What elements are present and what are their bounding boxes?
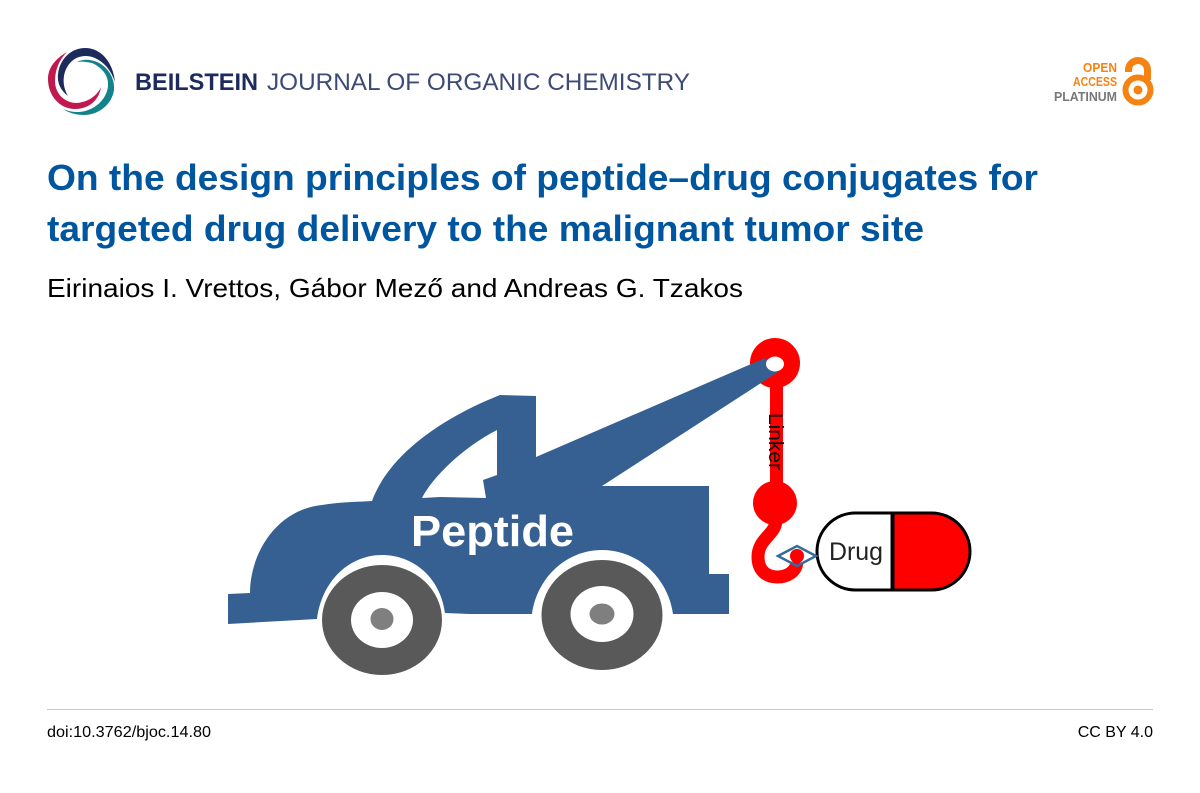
linker ring and chain xyxy=(750,338,800,577)
title xyxy=(47,157,1038,249)
license: CC BY 4.0 xyxy=(1078,724,1153,741)
open access platinum badge: ACCESS xyxy=(1073,75,1117,89)
ring hole xyxy=(766,356,784,372)
drug capsule: Drug xyxy=(829,538,883,566)
peptide truck body xyxy=(228,358,778,624)
open access platinum badge: PLATINUM xyxy=(1054,90,1117,104)
title: targeted drug delivery to the malignant tumor site xyxy=(47,208,924,249)
tow truck illustration xyxy=(228,338,970,675)
rear wheel xyxy=(542,560,662,670)
doi: doi:10.3762/bjoc.14.80 xyxy=(47,724,211,741)
cleavable bond: red dot in blue diamond xyxy=(778,546,816,566)
journal name: JOURNAL OF ORGANIC CHEMISTRY xyxy=(267,69,690,96)
open access platinum badge: OPEN xyxy=(1083,61,1117,75)
footer rule xyxy=(47,709,1153,710)
open access platinum badge xyxy=(1054,60,1150,104)
label: Peptide: Peptide xyxy=(411,507,574,556)
icon: Beilstein swirl logo xyxy=(48,48,115,115)
drug capsule xyxy=(817,513,970,590)
title: On the design principles of peptide–drug conjugates for xyxy=(47,157,1038,198)
label: Linker: Linker xyxy=(764,413,786,470)
authors: Eirinaios I. Vrettos, Gábor Mező and Andreas G. Tzakos xyxy=(47,273,743,303)
front wheel xyxy=(322,565,442,675)
journal name: BEILSTEIN xyxy=(135,69,258,96)
cab window xyxy=(422,430,497,498)
